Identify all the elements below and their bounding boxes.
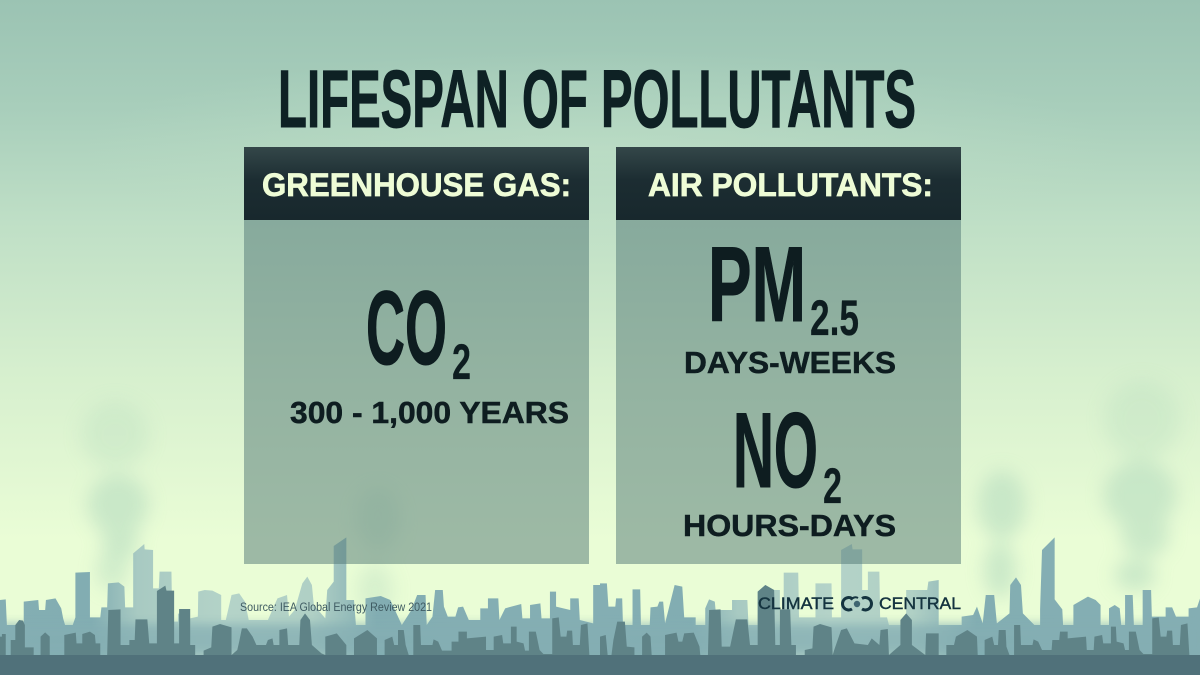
panel: air pollutants bbox=[616, 147, 961, 564]
PM2.5 lifespan: DAYS-WEEKS bbox=[684, 345, 896, 380]
panel body bbox=[616, 147, 961, 564]
CO2 formula: 2 bbox=[452, 334, 471, 390]
city skyline: far layer bbox=[0, 537, 1200, 655]
icon: interlocking rings bbox=[843, 597, 871, 610]
panel body bbox=[244, 147, 589, 564]
panel heading: GREENHOUSE GAS: bbox=[262, 167, 571, 203]
PM2.5 formula: PM bbox=[708, 224, 806, 344]
NO2 formula bbox=[733, 390, 842, 514]
NO2 formula: 2 bbox=[823, 458, 842, 514]
source note: Source: IEA Global Energy Review 2021 bbox=[240, 602, 432, 614]
panel: greenhouse gas bbox=[244, 147, 589, 564]
NO2 formula: NO bbox=[733, 390, 818, 510]
logo: Climate Central: CLIMATE bbox=[758, 595, 834, 613]
city skyline: near layer bbox=[0, 585, 1200, 657]
logo: Climate Central: CENTRAL bbox=[879, 595, 961, 613]
panel heading: AIR POLLUTANTS: bbox=[648, 167, 933, 203]
panel header bar bbox=[616, 147, 961, 220]
NO2 lifespan: HOURS-DAYS bbox=[683, 508, 896, 543]
panel header bar bbox=[244, 147, 589, 220]
PM2.5 formula: 2.5 bbox=[810, 290, 859, 346]
CO2 formula: CO bbox=[366, 270, 447, 387]
ground band bbox=[0, 655, 1200, 675]
smoke plumes bbox=[81, 380, 1180, 616]
CO2 formula bbox=[366, 270, 471, 390]
logo: Climate Central bbox=[758, 595, 961, 613]
CO2 lifespan: 300 - 1,000 YEARS bbox=[290, 395, 569, 430]
